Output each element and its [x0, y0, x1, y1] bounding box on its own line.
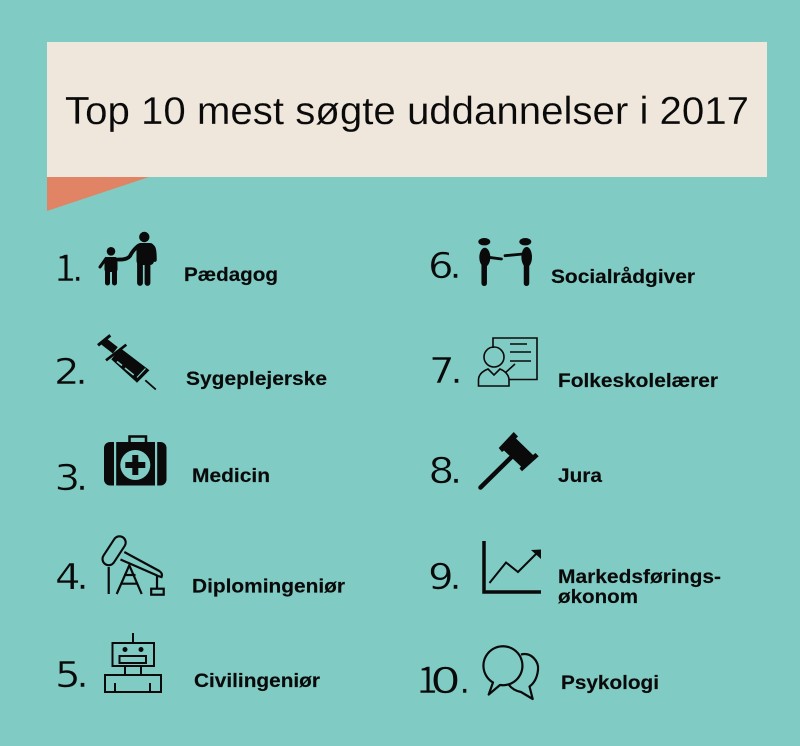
- icon: robot: [105, 633, 161, 692]
- banner fold: [47, 177, 149, 211]
- label line 2: økonom: [558, 586, 638, 608]
- number 10: 1: [417, 650, 438, 704]
- label: Pædagog: [184, 264, 278, 286]
- item 6: Socialrådgiver: [428, 238, 695, 288]
- icon: teacher at board: [478, 338, 537, 386]
- number 1: 1: [55, 238, 76, 292]
- icon: speech bubbles: [483, 646, 538, 699]
- icon: handshake figures: [478, 238, 532, 283]
- item 2: Sygeplejerske: [54, 335, 327, 393]
- item 10: Psykologi: [417, 646, 659, 704]
- number 4: 4.: [55, 557, 86, 598]
- label: Medicin: [192, 465, 270, 487]
- item 9: Markedsførings-økonom: [428, 541, 721, 608]
- number 5: 5.: [55, 655, 86, 696]
- icon: gavel: [480, 432, 539, 488]
- number 10, zero: 0: [430, 660, 458, 702]
- title: Top 10 mest søgte uddannelser i 2017: [65, 90, 749, 133]
- icon: adult and child: [100, 232, 155, 283]
- number 1, period: .: [72, 249, 80, 290]
- number 6: 6.: [428, 246, 459, 287]
- item 7: Folkeskolelærer: [429, 338, 718, 392]
- item 5: Civilingeniør: [55, 633, 320, 696]
- label: Folkeskolelærer: [558, 370, 718, 392]
- icon: first aid case: [104, 436, 166, 486]
- label: Socialrådgiver: [551, 265, 695, 288]
- label: Civilingeniør: [194, 670, 320, 692]
- number 3: 3.: [54, 458, 85, 499]
- number 2: 2.: [54, 352, 85, 393]
- item 4: Diplomingeniør: [55, 542, 345, 598]
- item 8: Jura: [428, 432, 602, 492]
- number 8: 8.: [428, 451, 459, 492]
- number 10, period: .: [459, 661, 467, 702]
- item 1: Pædagog: [55, 232, 278, 292]
- label: Markedsførings-: [558, 566, 721, 588]
- number 7: 7.: [429, 351, 460, 392]
- label: Jura: [558, 465, 602, 487]
- label: Psykologi: [561, 672, 659, 694]
- banner panel: [47, 42, 767, 177]
- number 9: 9.: [428, 557, 459, 598]
- item 3: Medicin: [54, 436, 270, 499]
- label: Diplomingeniør: [192, 576, 345, 598]
- icon: oil pump: [109, 542, 164, 595]
- icon: syringe: [98, 335, 156, 390]
- label: Sygeplejerske: [186, 368, 327, 390]
- title banner: [47, 42, 767, 211]
- icon: rising line chart: [484, 541, 541, 592]
